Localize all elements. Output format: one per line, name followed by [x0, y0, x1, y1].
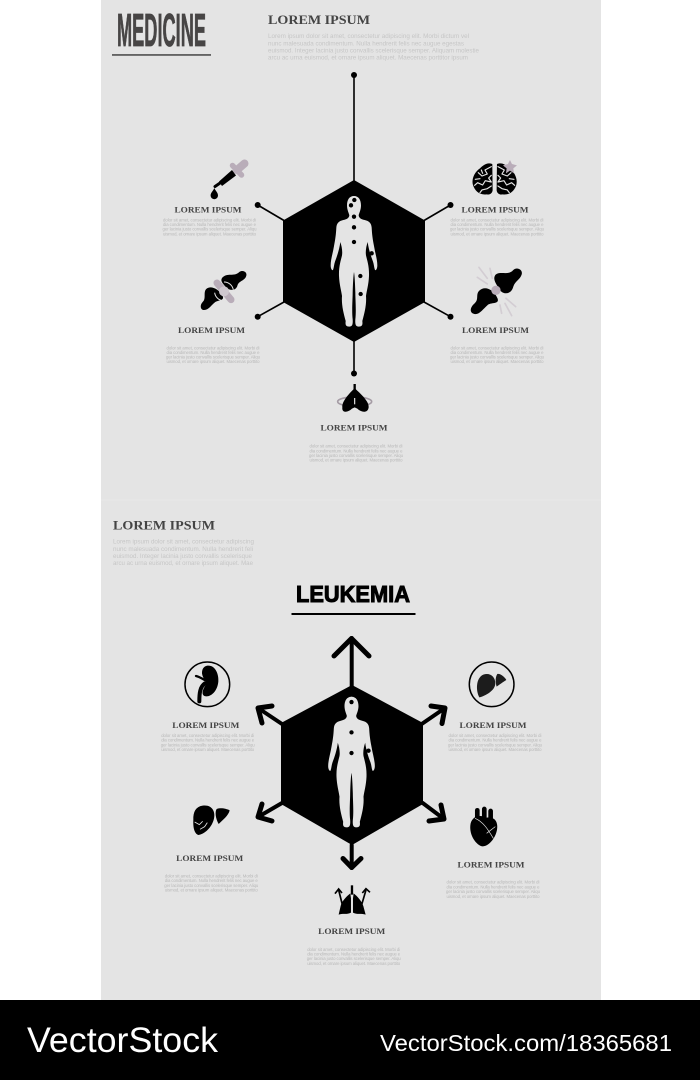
text block: intro: nunc malesuada condimentum. Nulla hendrerit felis nec augue egestas [268, 40, 465, 47]
icon: liver in circle [469, 662, 514, 707]
footer image id: VectorStock.com/18365681 [380, 1030, 672, 1056]
label: lungs with arrows: dolor sit amet, consectetur adipiscing elit. Morbi di [307, 947, 400, 952]
icon: bandaged joint [201, 271, 246, 310]
label: heart: ger lacinia justo convallis scelerisque semper. Aliqu [446, 889, 541, 894]
footer bar [0, 1000, 700, 1080]
icon: painful joint [471, 267, 522, 316]
label: brain: LOREM IPSUM [462, 205, 529, 214]
panel: leukemia [101, 500, 601, 1000]
label: liver in circle: LOREM IPSUM [460, 721, 527, 730]
label: lungs with arrows: ger lacinia justo convallis scelerisque semper. Aliqu [307, 956, 401, 961]
icon: brain [473, 160, 517, 195]
label: liver in circle [448, 721, 543, 752]
label: liver [164, 854, 259, 892]
label: brain: dolor sit amet, consectetur adipiscing elit. Morbi di [450, 218, 544, 222]
label: dropper: ger lacinia justo convallis scelerisque semper. Aliqu [162, 226, 257, 232]
label: brain: ger lacinia justo convallis scelerisque semper. Aliqu [450, 226, 545, 232]
icon: liver [193, 805, 230, 835]
label: lungs with arrows: dia condimentum. Nulla hendrerit felis nec augue e [307, 952, 401, 956]
label: liver in circle: ger lacinia justo convallis scelerisque semper. Aliqu [448, 742, 543, 747]
arrows [258, 638, 445, 868]
label: heart: LOREM IPSUM [458, 860, 525, 870]
label: painful joint: uismod, et ornare ipsum aliquet. Maecenas porttito [450, 359, 544, 364]
label: brain: dia condimentum. Nulla hendrerit felis nec augue e [450, 222, 544, 227]
human figure with tumour dots [331, 196, 377, 327]
label: liver: LOREM IPSUM [176, 854, 243, 863]
label: painful joint: ger lacinia justo convallis scelerisque semper. Aliqu [450, 354, 545, 360]
label: brain [450, 205, 545, 236]
label: liver: dolor sit amet, consectetur adipiscing elit. Morbi di [165, 874, 258, 878]
label: liver in circle: uismod, et ornare ipsum aliquet. Maecenas porttito [448, 747, 542, 752]
icon: dropper [211, 164, 244, 199]
label: bandaged joint: dia condimentum. Nulla hendrerit felis nec augue e [166, 350, 260, 355]
title: medicine [112, 4, 211, 56]
label: dropper [162, 205, 257, 236]
label: kidney: LOREM IPSUM [172, 721, 239, 730]
label: bandaged joint: ger lacinia justo convallis scelerisque semper. Aliqu [166, 354, 261, 360]
label: dropper: LOREM IPSUM [174, 205, 242, 214]
hexagon [283, 180, 425, 342]
label: dropper: dia condimentum. Nulla hendrerit felis nec augue e [163, 222, 257, 227]
text block: leukemia intro: euismod. Integer lacinia justo convallis scelerisque [113, 553, 252, 560]
label: kidney: dia condimentum. Nulla hendrerit felis nec augue e [161, 738, 255, 743]
label: lungs with arrows: LOREM IPSUM [318, 927, 385, 936]
connector lines [255, 72, 454, 376]
label: lungs with arrows: uismod, et ornare ipsum aliquet. Maecenas porttito [307, 961, 401, 966]
text block: intro: Lorem ipsum dolor sit amet, consectetur adipiscing elit. Morbi dictum vel [268, 33, 470, 40]
label: heart: dolor sit amet, consectetur adipiscing elit. Morbi di [446, 880, 540, 884]
text block: leukemia intro: Lorem ipsum dolor sit amet, consectetur adipiscing [113, 538, 254, 546]
label: lungs: uismod, et ornare ipsum aliquet. Maecenas porttito [310, 458, 403, 462]
icon: kidney [185, 662, 230, 707]
label: painful joint: LOREM IPSUM [462, 326, 529, 335]
text block: intro: euismod. Integer lacinia justo convallis scelerisque semper. Aliquam molestie [268, 47, 479, 54]
icon: lungs with arrows [335, 885, 370, 915]
label: kidney: uismod, et ornare ipsum aliquet. Maecenas porttito [161, 747, 255, 752]
label: lungs: dolor sit amet, consectetur adipiscing elit. Morbi di [310, 444, 403, 448]
label: painful joint [450, 326, 545, 364]
label: brain: uismod, et ornare ipsum aliquet. Maecenas porttito [450, 232, 544, 236]
label: bandaged joint [166, 326, 261, 364]
heading: intro: LOREM IPSUM [268, 12, 370, 27]
label: liver: uismod, et ornare ipsum aliquet. Maecenas porttito [165, 888, 258, 892]
label: liver in circle: dia condimentum. Nulla hendrerit felis nec augue e [448, 738, 542, 743]
label: kidney: ger lacinia justo convallis scelerisque semper. Aliqu [161, 742, 255, 747]
label: painful joint: dia condimentum. Nulla hendrerit felis nec augue e [450, 350, 544, 355]
label: dropper: dolor sit amet, consectetur adipiscing elit. Morbi di [163, 218, 256, 222]
label: heart: uismod, et ornare ipsum aliquet. Maecenas porttito [446, 894, 540, 899]
text block: leukemia intro: arcu ac urna euismod, et ornare ipsum aliquet. Mae [113, 560, 253, 567]
label: heart [446, 860, 541, 899]
label: bandaged joint: LOREM IPSUM [178, 326, 245, 335]
text block: intro: arcu ac urna euismod, et ornare ipsum aliquet. Maecenas porttitor ipsum [268, 55, 468, 62]
label: liver: ger lacinia justo convallis scelerisque semper. Aliqu [164, 883, 259, 888]
title: leukemia: LEUKEMIA [296, 581, 410, 607]
human figure with tumour dots [328, 697, 375, 827]
icon: lungs with ring [338, 384, 372, 412]
panel: medicine: MEDICINE [117, 4, 206, 56]
label: lungs: LOREM IPSUM [320, 423, 388, 432]
label: dropper: uismod, et ornare ipsum aliquet. Maecenas porttito [163, 232, 257, 236]
label: liver in circle: dolor sit amet, consectetur adipiscing elit. Morbi di [448, 733, 542, 738]
text block: leukemia intro [113, 538, 254, 567]
label: liver: dia condimentum. Nulla hendrerit felis nec augue e [165, 878, 258, 883]
footer brand: VectorStock [27, 1021, 219, 1060]
label: kidney [161, 721, 255, 752]
label: bandaged joint: uismod, et ornare ipsum aliquet. Maecenas porttito [166, 359, 260, 364]
text block: leukemia intro: nunc malesuada condimentum. Nulla hendrerit feli [113, 546, 254, 553]
label: lungs: ger lacinia justo convallis scelerisque semper. Aliqu [309, 453, 404, 458]
text block: intro [268, 33, 479, 62]
hexagon [281, 685, 423, 845]
panel: medicine [101, 0, 601, 500]
label: lungs [309, 423, 404, 462]
label: bandaged joint: dolor sit amet, consectetur adipiscing elit. Morbi di [166, 345, 260, 350]
label: heart: dia condimentum. Nulla hendrerit felis nec augue e [446, 884, 540, 890]
icon: heart [470, 809, 497, 846]
label: kidney: dolor sit amet, consectetur adipiscing elit. Morbi di [161, 733, 254, 738]
heading: leukemia intro: LOREM IPSUM [113, 518, 215, 532]
label: lungs with arrows [307, 927, 401, 966]
label: lungs: dia condimentum. Nulla hendrerit felis nec augue e [310, 448, 403, 453]
label: painful joint: dolor sit amet, consectetur adipiscing elit. Morbi di [450, 345, 544, 350]
